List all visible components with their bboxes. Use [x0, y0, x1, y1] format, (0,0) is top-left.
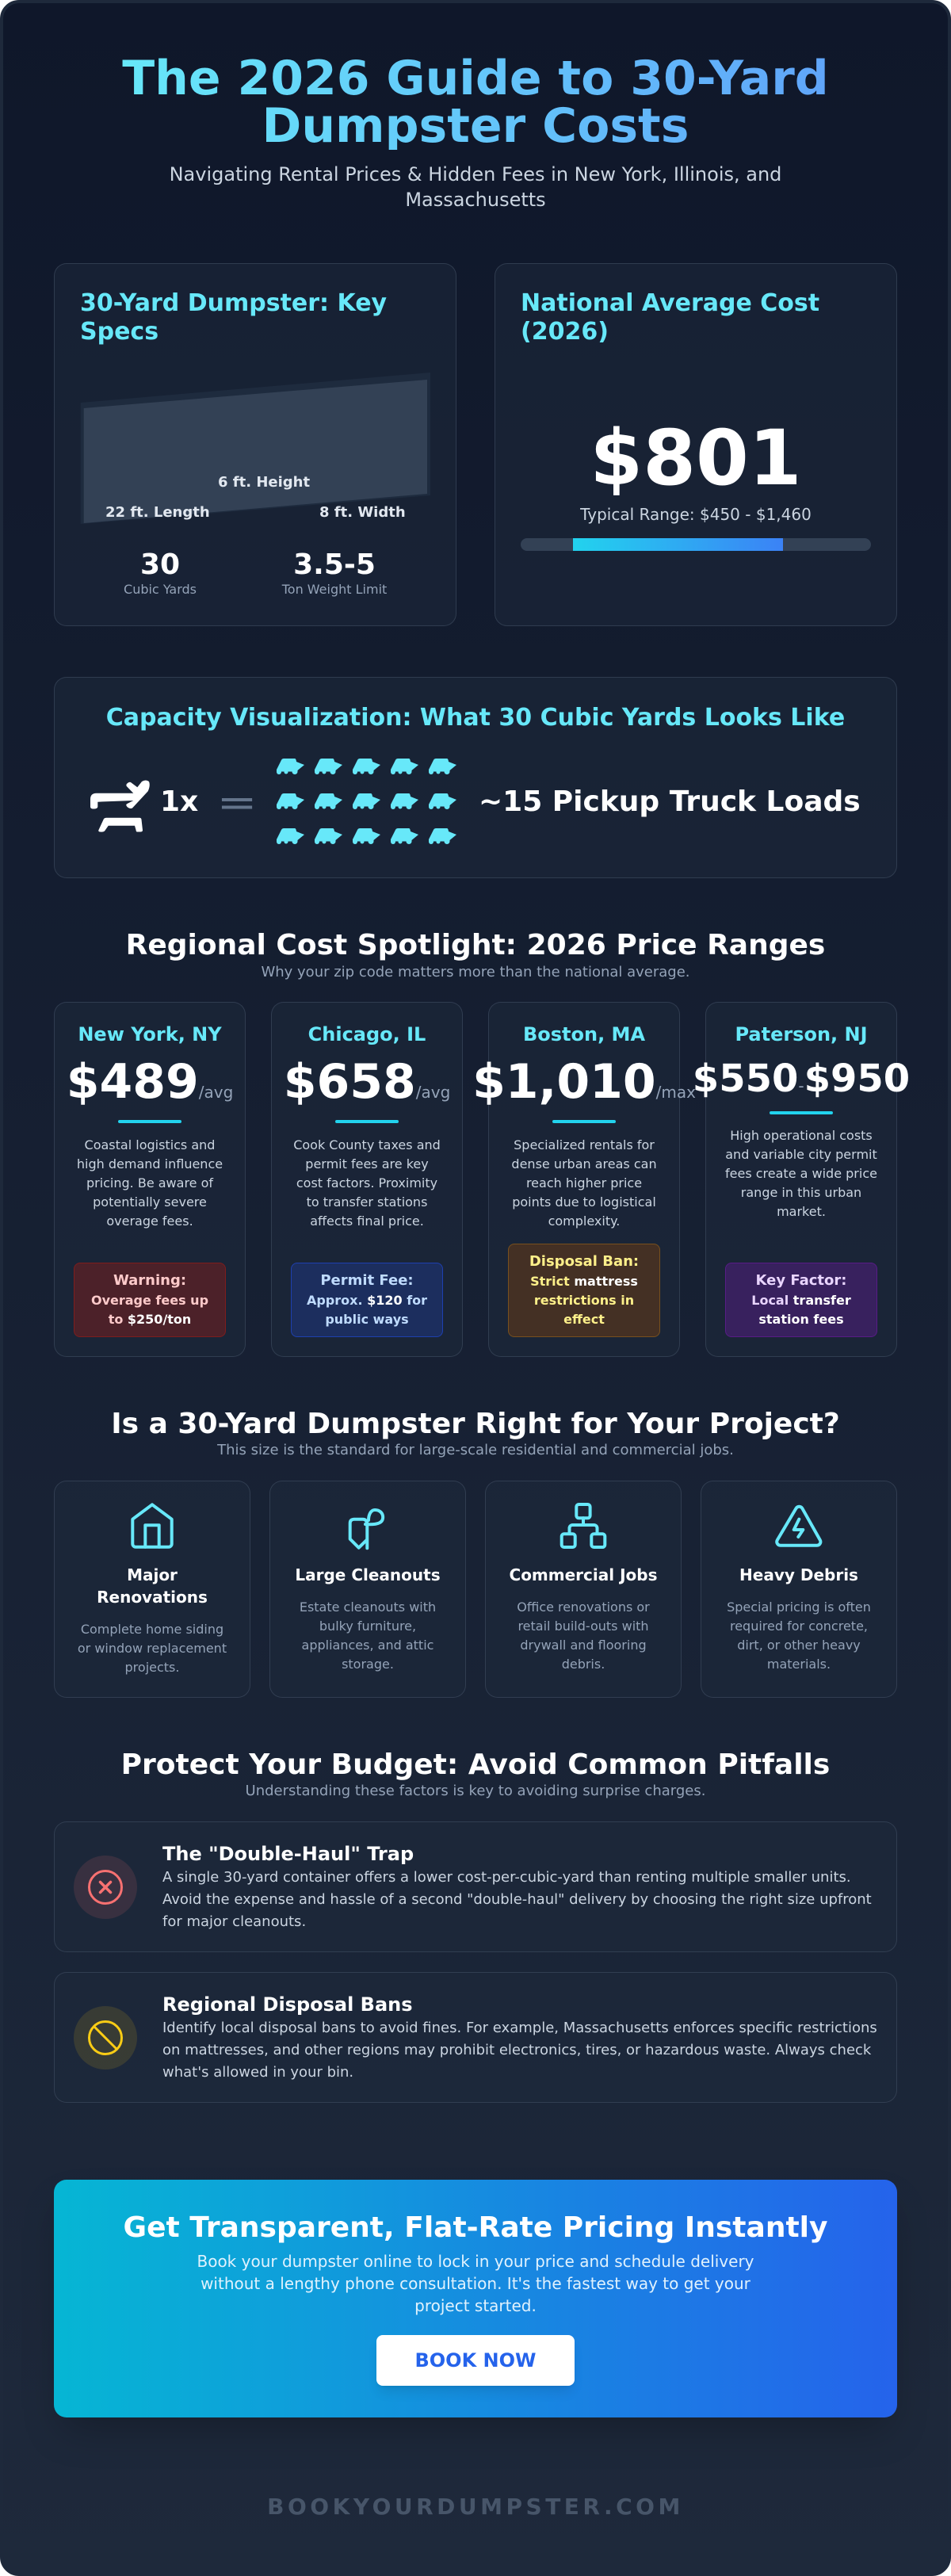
accent rule: Chicago: [335, 1120, 399, 1123]
stat: cubic yards: Cubic Yards: [124, 582, 197, 597]
label: width: 8 ft. Width: [319, 504, 406, 521]
text: commercial jobs: [517, 1599, 650, 1672]
callout: Chicago permit fee: Approx. $120 for: [307, 1293, 427, 1308]
heading: project fit: Is a 30-Yard Dumpster Right for Your Project?: [111, 1408, 840, 1440]
text: disposal bans: what's allowed in your bin.: [162, 2064, 353, 2081]
text: commercial jobs: Office renovations or: [517, 1599, 650, 1615]
callout: New York warning: [74, 1263, 226, 1337]
text: large cleanouts: [300, 1599, 436, 1672]
typical range: Typical Range: $450 - $1,460: [580, 505, 812, 524]
description: Boston: Specialized rentals for: [514, 1137, 655, 1152]
icon: tag broom: [349, 1508, 385, 1550]
text: commercial jobs: debris.: [562, 1657, 605, 1672]
panel: call to action: [54, 2180, 897, 2417]
text: call to action: without a lengthy phone consultation. It's the fastest way to get your: [201, 2274, 750, 2293]
description: Chicago: permit fees are key: [305, 1156, 429, 1171]
text: double-haul: [162, 1869, 872, 1930]
text: heavy debris: [727, 1599, 871, 1672]
text: disposal bans: Identify local disposal bans to avoid fines. For example, Massachusetts enforces specific restrictions: [162, 2020, 877, 2036]
price: Paterson: $550-$950: [693, 1057, 910, 1101]
text: call to action: Book your dumpster online to lock in your price and schedule delivery: [197, 2252, 754, 2271]
callout: Paterson key factor: [725, 1263, 877, 1337]
title: large cleanouts: Large Cleanouts: [295, 1565, 441, 1584]
accent rule: Paterson: [770, 1111, 833, 1114]
text: truck loads: ~15 Pickup Truck Loads: [479, 785, 861, 818]
description: Paterson: [725, 1128, 877, 1219]
callout: Chicago permit fee: Permit Fee:: [320, 1272, 414, 1289]
text: large cleanouts: bulky furniture,: [319, 1619, 416, 1634]
text: major renovations: projects.: [125, 1660, 179, 1675]
description: Chicago: cost factors. Proximity: [296, 1175, 437, 1191]
stat: ton weight limit: Ton Weight Limit: [282, 582, 387, 597]
description: Boston: complexity.: [548, 1213, 620, 1229]
title: disposal bans: Regional Disposal Bans: [162, 1993, 413, 2016]
text: heavy debris: Special pricing is often: [727, 1599, 871, 1615]
callout: New York warning: Overage fees up: [91, 1293, 208, 1308]
callout: Boston disposal ban: restrictions in: [534, 1293, 634, 1308]
panel: major renovations: [54, 1481, 250, 1698]
panel: Boston: [488, 1002, 680, 1357]
text: large cleanouts: storage.: [342, 1657, 394, 1672]
callout: Boston disposal ban: [508, 1244, 660, 1337]
heading: capacity: Capacity Visualization: What 30 Cubic Yards Looks Like: [106, 704, 845, 732]
price: Chicago: $658/avg: [284, 1054, 450, 1110]
heading: pitfalls: Protect Your Budget: Avoid Common Pitfalls: [121, 1749, 830, 1781]
text: 1x: 1x: [160, 785, 198, 818]
subtitle: Navigating Rental Prices & Hidden Fees in New York, Illinois, and: [170, 163, 781, 185]
description: Paterson: fees create a wide price: [725, 1166, 877, 1181]
heading: call to action: Get Transparent, Flat-Rate Pricing Instantly: [124, 2211, 827, 2244]
accent rule: New York: [118, 1120, 181, 1123]
subheading: pitfalls: Understanding these factors is key to avoiding surprise charges.: [246, 1783, 705, 1799]
subtitle: [170, 163, 781, 211]
heading: key specs: [80, 289, 387, 346]
label: length: 22 ft. Length: [105, 504, 210, 521]
text: call to action: [197, 2252, 754, 2315]
stat: ton weight limit: [282, 548, 387, 597]
city: Paterson: Paterson, NJ: [735, 1023, 868, 1045]
label: height: 6 ft. Height: [218, 474, 310, 491]
text: call to action: project started.: [414, 2296, 537, 2315]
description: New York: [77, 1137, 223, 1229]
heading: key specs: Specs: [80, 318, 158, 346]
description: New York: high demand influence: [77, 1156, 223, 1171]
subtitle: Massachusetts: [405, 189, 546, 211]
callout: Boston disposal ban: effect: [563, 1312, 605, 1327]
text: disposal bans: [162, 2020, 877, 2081]
text: commercial jobs: retail build-outs with: [518, 1619, 649, 1634]
description: Boston: [511, 1137, 657, 1229]
description: New York: potentially severe: [93, 1194, 207, 1210]
panel: disposal bans: [54, 1972, 897, 2103]
heading: national average: National Average Cost: [521, 289, 819, 317]
callout: Paterson key factor: Key Factor:: [756, 1272, 846, 1289]
description: Chicago: affects final price.: [310, 1213, 424, 1229]
text: disposal bans: on mattresses, and other regions may prohibit electronics, tires, or hazardous waste. Always check: [162, 2042, 871, 2058]
city: New York: New York, NY: [78, 1023, 222, 1045]
description: Paterson: and variable city permit: [725, 1147, 877, 1162]
panel: large cleanouts: [269, 1481, 466, 1698]
text: commercial jobs: drywall and flooring: [520, 1638, 647, 1653]
text: major renovations: [78, 1622, 227, 1675]
panel: commercial jobs: [485, 1481, 682, 1698]
text: large cleanouts: Estate cleanouts with: [300, 1599, 436, 1615]
callout: Chicago permit fee: [291, 1263, 443, 1337]
callout: Paterson key factor: Local transfer: [751, 1293, 851, 1308]
heading: key specs: 30-Yard Dumpster: Key: [80, 289, 387, 317]
description: Paterson: market.: [777, 1204, 826, 1219]
panel: Chicago: [271, 1002, 463, 1357]
panel: national average: [495, 263, 897, 626]
panel: double-haul: [54, 1821, 897, 1952]
callout: Paterson key factor: station fees: [758, 1312, 844, 1327]
big number: $801: [590, 414, 802, 503]
text: large cleanouts: appliances, and attic: [302, 1638, 433, 1653]
icon: hierarchy: [560, 1503, 607, 1549]
panel: heavy debris: [701, 1481, 897, 1698]
icon: yellow prohibited: [74, 2006, 137, 2070]
heading: national average: [521, 289, 819, 346]
description: Boston: points due to logistical: [512, 1194, 656, 1210]
description: New York: overage fees.: [106, 1213, 193, 1229]
callout: New York warning: to $250/ton: [109, 1312, 191, 1327]
footer brand: BOOKYOURDUMPSTER.COM: [267, 2494, 684, 2520]
description: New York: pricing. Be aware of: [86, 1175, 213, 1191]
description: Paterson: range in this urban: [741, 1185, 861, 1200]
description: Boston: reach higher price: [526, 1175, 642, 1191]
description: Paterson: High operational costs: [730, 1128, 873, 1143]
icon: house: [131, 1503, 174, 1549]
callout: Chicago permit fee: public ways: [325, 1312, 409, 1327]
text: major renovations: or window replacement: [78, 1641, 227, 1656]
text: heavy debris: dirt, or other heavy: [737, 1638, 861, 1653]
title: major renovations: [97, 1565, 208, 1607]
title: commercial jobs: Commercial Jobs: [510, 1565, 657, 1584]
heading: national average: (2026): [521, 318, 609, 346]
text: heavy debris: required for concrete,: [730, 1619, 868, 1634]
title: heavy debris: Heavy Debris: [739, 1565, 858, 1584]
stat: cubic yards: 30: [140, 548, 180, 581]
icon: dumpster: [90, 780, 150, 832]
subheading: project fit: This size is the standard for large-scale residential and commercial jobs.: [217, 1442, 734, 1458]
range bar: [521, 538, 871, 551]
text: double-haul: for major cleanouts.: [162, 1913, 306, 1930]
title: major renovations: Renovations: [97, 1588, 208, 1607]
title: [122, 55, 829, 150]
panel: capacity: [54, 677, 897, 878]
panel: key specs: [54, 263, 456, 626]
equals sign: =: [216, 781, 258, 825]
text: heavy debris: materials.: [767, 1657, 831, 1672]
title: major renovations: Major: [127, 1565, 178, 1584]
heading: regional: Regional Cost Spotlight: 2026 Price Ranges: [126, 929, 825, 961]
city: Boston: Boston, MA: [523, 1023, 645, 1045]
panel: Paterson: [705, 1002, 897, 1357]
callout: New York warning: Warning:: [113, 1272, 186, 1289]
button: book now: BOOK NOW: [414, 2349, 536, 2372]
icon: red x circle: [74, 1856, 137, 1919]
accent rule: Boston: [552, 1120, 616, 1123]
callout: Boston disposal ban: Strict mattress: [530, 1274, 638, 1289]
description: Boston: dense urban areas can: [511, 1156, 657, 1171]
description: Chicago: to transfer stations: [307, 1194, 427, 1210]
price: Boston: $1,010/max: [472, 1054, 696, 1110]
text: double-haul: Avoid the expense and hassle of a second "double-haul" delivery by choosing the right size upfront: [162, 1891, 872, 1908]
title: double-haul: The "Double-Haul" Trap: [162, 1843, 414, 1865]
text: double-haul: A single 30-yard container offers a lower cost-per-cubic-yard than renting multiple smaller units.: [162, 1869, 851, 1886]
subheading: regional: Why your zip code matters more than the national average.: [261, 964, 690, 980]
city: Chicago: Chicago, IL: [308, 1023, 426, 1045]
icon: warning triangle: [775, 1504, 823, 1547]
description: Chicago: [293, 1137, 441, 1229]
button: book now: [376, 2335, 575, 2386]
icon grid: 15 pickup trucks: [277, 759, 456, 844]
description: New York: Coastal logistics and: [85, 1137, 215, 1152]
callout: Boston disposal ban: Disposal Ban:: [529, 1253, 639, 1270]
stat: cubic yards: [124, 548, 197, 597]
title: The 2026 Guide to 30-Yard: [122, 51, 829, 106]
price: New York: $489/avg: [67, 1054, 233, 1110]
text: major renovations: Complete home siding: [81, 1622, 223, 1637]
panel: New York: [54, 1002, 246, 1357]
title: Dumpster Costs: [262, 98, 689, 154]
description: Chicago: Cook County taxes and: [293, 1137, 441, 1152]
stat: ton weight limit: 3.5-5: [293, 548, 376, 581]
diagram: dumpster shape: [81, 373, 430, 523]
